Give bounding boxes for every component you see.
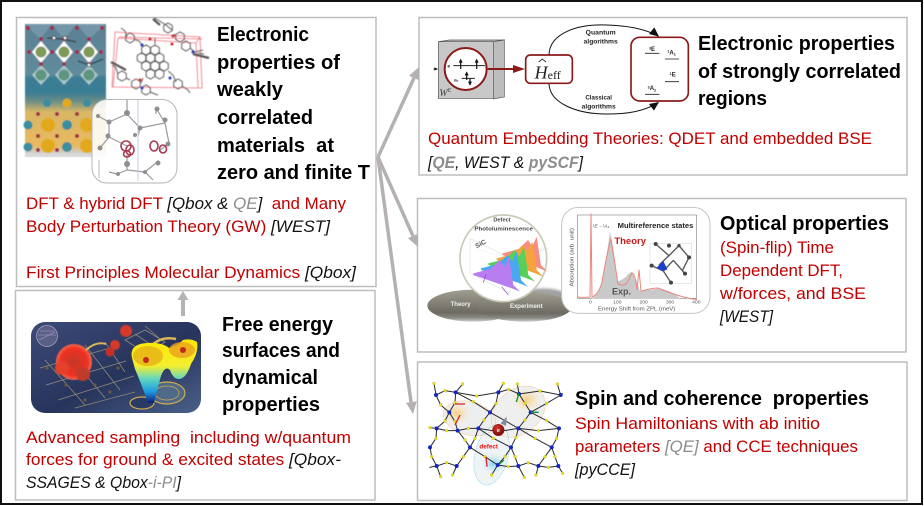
text: optical methods: w/forces, and BSE [719, 285, 866, 303]
chart: absorption spectrum: Multireference states [618, 223, 693, 230]
box: many-body states [631, 37, 688, 101]
heading: free energy surfaces: surfaces and [222, 339, 340, 362]
text: quantum embedding methods [427, 130, 872, 172]
text: spin methods: parameters [QE] and CCE techniques [575, 438, 858, 456]
text: advanced sampling methods [26, 429, 351, 492]
chart: absorption spectrum: ¹E→¹A₁ [593, 224, 610, 230]
text: optical methods: [WEST] [719, 308, 773, 326]
text: optical methods [719, 239, 866, 326]
chart: absorption spectrum: 300 [666, 300, 674, 306]
image: silicon wafers: Experiment [510, 304, 543, 310]
label: algorithms [582, 30, 618, 111]
panel: strongly correlated regions [419, 18, 907, 175]
arrowheads [406, 67, 419, 414]
box: many-body states: E [651, 47, 655, 53]
text: spin methods [574, 415, 858, 479]
text: optical methods: Dependent DFT, [720, 262, 843, 280]
box: many-body states: 1 [667, 50, 669, 54]
text: advanced sampling methods: forces for ground & excited states [Qbox- [26, 451, 342, 469]
text: advanced sampling methods: Advanced sampling including w/quantum [26, 429, 351, 447]
icon: embedding cube: a₁ [454, 77, 459, 83]
heading: strongly correlated regions: regions [698, 87, 767, 110]
icon: embedding cube: e [447, 64, 450, 70]
image: silicon wafers: Theory [451, 302, 471, 308]
icon: embedding cube [433, 40, 504, 99]
image: molecular crystal unit cell [111, 18, 209, 95]
chart: absorption spectrum: Exp. [612, 287, 631, 297]
heading: weakly correlated materials: Electronic [217, 23, 309, 46]
chart: absorption spectrum: 0 [589, 300, 592, 306]
box: many-body states: E [672, 73, 676, 79]
box: many-body states: 3 [649, 46, 651, 50]
panel: optical properties [418, 198, 906, 352]
text: optical methods: (Spin-flip) Time [720, 239, 834, 257]
box: many-body states: 1 [670, 72, 672, 76]
heading: strongly correlated regions: Electronic properties [698, 32, 895, 55]
image: defect spin lattice [428, 376, 564, 489]
image: silicon wafers [427, 288, 573, 322]
box: many-body states: 1 [674, 53, 676, 57]
heading: strongly correlated regions: of strongly correlated [698, 60, 901, 83]
text: advanced sampling methods: SSAGES & Qbox-i-PI] [26, 474, 181, 492]
text: methods for weakly correlated materials [26, 195, 356, 282]
image: oxide slab structure [24, 24, 106, 157]
heading: optical properties: Optical properties [720, 212, 889, 235]
chart: absorption spectrum: Energy Shift from ZPL (meV) [598, 306, 676, 312]
icon: embedding cube: W [439, 88, 448, 99]
heading: weakly correlated materials: properties of [217, 51, 340, 74]
image: defect photoluminescence lens: Defect [493, 218, 511, 224]
heading: strongly correlated regions [698, 32, 901, 110]
heading: weakly correlated materials: weakly [216, 78, 284, 101]
chart: absorption spectrum: 400 [692, 300, 701, 306]
heading: free energy surfaces: properties [222, 393, 320, 416]
heading: weakly correlated materials: correlated [217, 106, 313, 129]
panel: free energy surfaces [16, 290, 375, 500]
diagram: quantum embedding schematic [433, 25, 688, 114]
box: many-body states: 2 [654, 88, 656, 92]
image: defect spin lattice: e [497, 428, 500, 434]
box: many-body states: A [650, 86, 655, 92]
panel: spin and coherence [418, 362, 907, 500]
text: quantum embedding methods: [QE, WEST & pySCF] [427, 154, 583, 172]
box: effective Hamiltonian: H [535, 62, 548, 82]
arrow: classical algorithms path [549, 84, 658, 114]
heading: spin and coherence properties: Spin and coherence properties [575, 387, 869, 410]
arrow: quantum algorithms path [549, 25, 658, 54]
chart: absorption spectrum: 100 [613, 300, 622, 306]
image: defect photoluminescence lens [460, 215, 548, 302]
box: effective Hamiltonian [526, 55, 572, 83]
image: defect photoluminescence lens: SiC [474, 239, 488, 250]
text: quantum embedding methods: Quantum Embedding Theories: QDET and embedded BSE [428, 130, 872, 148]
box: many-body states: A [669, 50, 674, 56]
label: algorithms: algorithms [584, 39, 618, 46]
image: free energy surface over lattice [31, 322, 201, 413]
image: defect spin lattice: defect [479, 443, 499, 450]
chart: absorption spectrum: 200 [640, 300, 648, 306]
image: defect photoluminescence lens: Photoluminescence [474, 226, 533, 232]
arrows: electronic properties to right panels [378, 78, 414, 402]
heading: weakly correlated materials [216, 23, 370, 184]
label: algorithms: Classical [585, 95, 612, 102]
text: methods for weakly correlated materials: First Principles Molecular Dynamics [Qbox] [26, 264, 356, 282]
image: diamond lattice inset [92, 99, 177, 183]
box: effective Hamiltonian: eff [548, 68, 561, 82]
heading: weakly correlated materials: materials at [217, 134, 334, 157]
heading: weakly correlated materials: zero and finite T [217, 161, 370, 184]
chart: absorption spectrum: Theory [614, 236, 646, 246]
arrow: free energy up to electronic properties [178, 291, 188, 316]
heading: free energy surfaces: dynamical [222, 366, 318, 389]
icon: embedding cube: E [447, 88, 452, 94]
heading: free energy surfaces [222, 313, 340, 416]
box: many-body states: 3 [648, 85, 650, 89]
chart: absorption spectrum [562, 207, 710, 313]
chart: absorption spectrum: Absorption (arb. unit) [569, 228, 575, 287]
heading: free energy surfaces: Free energy [222, 313, 334, 336]
text: spin methods: Spin Hamiltonians with ab initio [575, 415, 820, 433]
arrow: to effective Hamiltonian [488, 65, 525, 73]
panel: weakly correlated materials [16, 18, 376, 286]
text: methods for weakly correlated materials: DFT & hybrid DFT [Qbox & QE] and Many [26, 195, 347, 213]
label: algorithms: algorithms [582, 104, 616, 111]
label: algorithms: Quantum [586, 30, 616, 37]
text: spin methods: [pyCCE] [574, 461, 635, 479]
text: methods for weakly correlated materials: Body Perturbation Theory (GW) [WEST] [26, 218, 330, 236]
